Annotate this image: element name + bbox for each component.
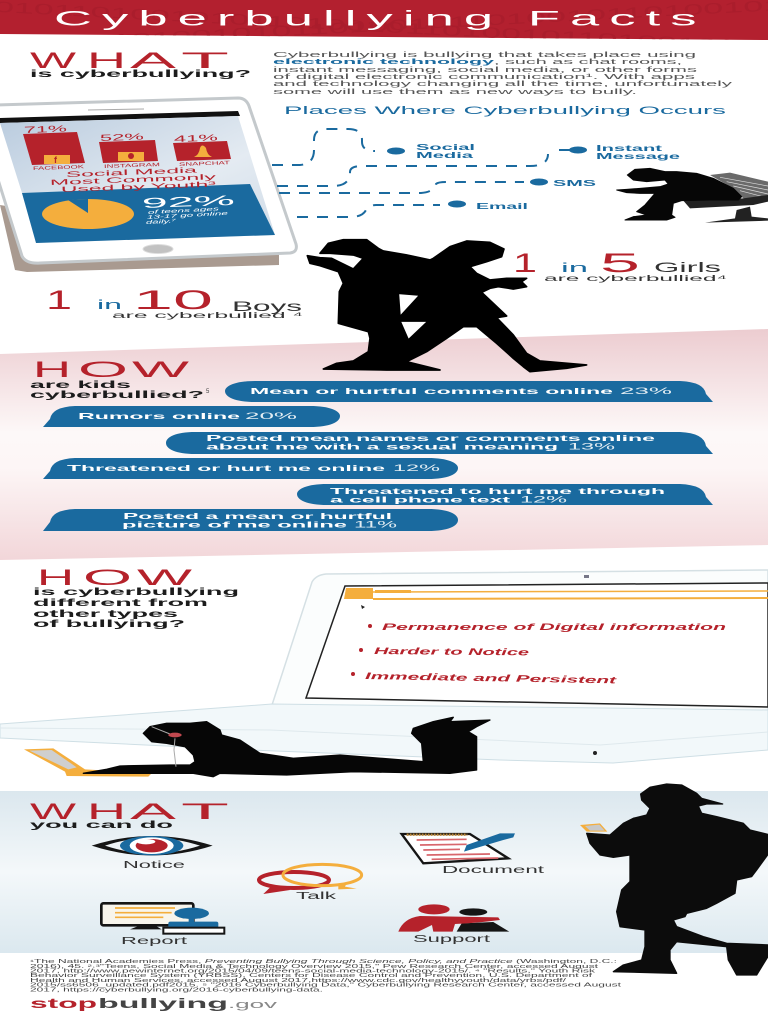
screen list: Permanence of Digital information (382, 622, 726, 633)
stat: 1 in 5 girls: 5 (600, 248, 640, 278)
bar: facebook 71% (23, 124, 85, 172)
heading: W (132, 357, 190, 382)
bar: facebook 71%: FACEBOOK (33, 164, 85, 172)
stat: 92 percent online daily: daily.⁷ (146, 218, 178, 226)
heading: H (87, 799, 126, 824)
icon: speech bubbles, talk (259, 864, 362, 902)
heading: how is cyberbullying different: W (137, 565, 193, 590)
icon: eye, notice (92, 836, 213, 871)
logo: stopbullying.gov: stop (30, 995, 97, 1011)
heading: how is cyberbullying different: different from (33, 598, 208, 609)
heading (30, 799, 229, 831)
node: social media: Media (416, 151, 474, 160)
bubble: rumors 20%: Rumors online (78, 411, 241, 421)
heading (30, 357, 210, 401)
definition paragraph: of digital electronic communication¹. With apps (273, 72, 696, 81)
heading: you can do (30, 820, 173, 831)
bubble: hurtful picture 11% (43, 509, 458, 531)
bubble: threatened by text 12%: a cell phone text (330, 494, 511, 504)
bubble: threatened by text 12%: Threatened to hurt me through (330, 486, 665, 496)
heading: H (33, 357, 71, 382)
bubble: threatened online 12% (43, 458, 458, 479)
bar: snapchat 41%: 41% (174, 132, 218, 144)
stat: 1 in 5 girls: 1 (513, 248, 537, 278)
node: sms (530, 178, 597, 188)
stat: 1 in 10 boys: 1 (46, 285, 72, 315)
footnotes: ¹The National Academies Press, Preventing Bullying Through Science, Policy, and Practice (Washington, D.C.: (30, 959, 617, 965)
header band (0, 0, 768, 40)
definition paragraph: some will use them as new ways to bully. (273, 87, 637, 96)
definition paragraph (273, 50, 733, 96)
heading: what is cyberbullying: T (181, 48, 229, 73)
dashed network lines (272, 129, 570, 217)
heading: how is cyberbullying different: O (83, 565, 132, 590)
bubble: rumors 20% (43, 406, 340, 427)
node: social media: Social (416, 143, 475, 152)
node: instant message: Instant (596, 144, 663, 153)
footnotes: Behavior Surveillance System (YRBSS), Centers for Disease Control and Prevention, U.S. Department of (30, 973, 593, 979)
bubble: mean comments 23%: 23% (620, 386, 672, 396)
heading: what is cyberbullying (30, 48, 251, 80)
stat: 92 percent online daily (142, 192, 235, 226)
bar: instagram 52% (99, 131, 160, 170)
stat: 1 in 5 girls: are cyberbullied⁴ (544, 273, 728, 283)
stat: 1 in 10 boys: 10 (133, 285, 213, 315)
heading: how is cyberbullying different (33, 565, 239, 630)
node: social media (387, 143, 475, 160)
bubble: hurtful picture 11%: Posted a mean or hurtful (123, 511, 392, 521)
heading: T (181, 799, 229, 824)
bubble: sexual comments 13%: 13% (568, 442, 615, 452)
footnotes: 2017, https://cyberbullying.org/2016-cyberbullying-data. (30, 988, 323, 994)
bubble: mean comments 23%: Mean or hurtful comments online (250, 386, 614, 396)
footnotes: 2015/ss6506_updated.pdf2015. ⁵ "2016 Cyberbullying Data," Cyberbullying Research Center, accessed August (30, 982, 622, 988)
bubble: hurtful picture 11%: 11% (354, 520, 397, 530)
browser bar (344, 588, 768, 599)
heading: how is cyberbullying different: other types (33, 609, 179, 620)
stat: 92 percent online daily: of teens ages (148, 206, 220, 216)
heading: are kids (30, 380, 132, 391)
icon: eye, notice: Notice (123, 860, 186, 871)
silhouette: boy and girl back to back (307, 240, 587, 372)
heading: what is cyberbullying: A (130, 48, 177, 73)
bar: facebook 71%: 71% (24, 124, 67, 135)
definition paragraph: , such as chat rooms, (494, 57, 682, 66)
node: instant message (569, 144, 681, 161)
icon: monitor and person, report (101, 903, 224, 947)
icon: notepad, document: Document (442, 865, 544, 876)
bubble: mean comments 23% (225, 381, 713, 402)
definition paragraph: instant messaging, social media, or other forms (273, 65, 698, 74)
stat: 1 in 10 boys: are cyberbullied ⁴ (112, 310, 304, 320)
heading: what is cyberbullying: W (30, 48, 77, 73)
bubble: rumors 20%: 20% (245, 411, 297, 421)
node: email: Email (476, 202, 528, 211)
definition paragraph: and technology changing all the time, unfortunately (273, 79, 733, 88)
chart caption: Used by Youth³ (61, 180, 217, 194)
logo: stopbullying.gov (30, 995, 278, 1011)
bubble: sexual comments 13%: Posted mean names or comments online (206, 433, 656, 443)
footnotes: Health and Human Services, accessed August 2017,https://www.cdc.gov/healthyyouth/data/yrbs/pdf/ (30, 978, 567, 984)
stat: 1 in 10 boys: in (97, 297, 122, 312)
stat: 1 in 5 girls (513, 248, 728, 283)
icon: speech bubbles, talk: Talk (296, 891, 338, 902)
bar: snapchat 41% (173, 132, 231, 168)
node: sms: SMS (553, 179, 597, 188)
pie chart 92% (42, 199, 134, 229)
stat: 1 in 5 girls: Girls (654, 259, 721, 275)
heading: W (30, 799, 77, 824)
title: Cyberbullying Facts (54, 7, 696, 30)
logo: stopbullying.gov: bullying (98, 995, 228, 1011)
footnotes: 2017, http://www.pewinternet.org/2015/04/09/teens-social-media-technology-2015/. ⁴ "Results," Youth Risk (30, 968, 596, 974)
footnotes (30, 959, 622, 994)
chart caption (50, 165, 217, 194)
heading: what is cyberbullying: H (87, 48, 126, 73)
bar: snapchat 41%: SNAPCHAT (179, 160, 230, 168)
chart caption: Most Commonly (50, 172, 217, 187)
footnotes: 2016), 45. ²˒³"Teens, Social Media & Technology Overview 2015," Pew Research Center, accessed August (30, 964, 599, 970)
heading: how is cyberbullying different: is cyberbullying (33, 587, 239, 598)
bubble: sexual comments 13% (166, 432, 713, 454)
heading: O (78, 357, 128, 382)
icon: two people, support (398, 904, 509, 945)
heading: cyberbullied? (30, 390, 204, 401)
heading: places where cyberbullying occurs: Places Where Cyberbullying Occurs (284, 105, 727, 117)
definition paragraph: electronic technology (273, 57, 496, 66)
logo: stopbullying.gov: .gov (228, 999, 278, 1011)
icon: notepad, document (402, 833, 544, 876)
silhouette: person on bench (617, 168, 768, 223)
tablet (0, 98, 296, 272)
chart caption: Social Media (66, 165, 199, 179)
node: instant message: Message (596, 152, 681, 161)
stat: 1 in 5 girls: in (561, 260, 588, 275)
screen list: Harder to Notice (374, 646, 531, 658)
stat: 1 in 10 boys: Boys (232, 298, 302, 314)
heading: how is cyberbullying different: of bullying? (33, 619, 185, 630)
bar: facebook 71%: f (54, 155, 58, 165)
bubble: hurtful picture 11%: picture of me online (122, 520, 348, 530)
stat: 92 percent online daily: 92% (142, 192, 235, 211)
bubble: threatened by text 12%: 12% (520, 494, 567, 504)
definition paragraph: Cyberbullying is bullying that takes place using (273, 50, 696, 59)
bar: instagram 52%: INSTAGRAM (104, 162, 160, 170)
silhouette: girl lying with laptop (24, 717, 490, 777)
bubble: sexual comments 13%: about me with a sexual meaning (206, 442, 558, 452)
silhouette: boy with backpack and phone (580, 784, 768, 975)
heading: 5 (206, 389, 210, 395)
heading: how is cyberbullying different: H (37, 565, 74, 590)
stat: 92 percent online daily: 13-17 go online (147, 211, 228, 221)
stat: 1 in 10 boys (46, 285, 304, 320)
header band: 1001011010010101101001011010010110100101 (0, 0, 768, 55)
bar: instagram 52%: 52% (100, 131, 144, 143)
node: email (448, 200, 528, 211)
icon: monitor and person, report: Report (121, 936, 187, 947)
bubble: threatened by text 12% (297, 484, 713, 505)
panel: how are kids cyberbullied (0, 329, 768, 560)
screen list: Immediate and Persistent (365, 671, 618, 686)
heading: A (130, 799, 177, 824)
bubble: threatened online 12%: 12% (393, 463, 440, 473)
laptop (0, 570, 768, 763)
panel: what you can do (0, 791, 768, 953)
icon: two people, support: Support (413, 934, 490, 945)
screen list (351, 622, 726, 686)
heading: what is cyberbullying: is cyberbullying? (30, 69, 251, 80)
bubble: threatened online 12%: Threatened or hurt me online (67, 463, 386, 473)
